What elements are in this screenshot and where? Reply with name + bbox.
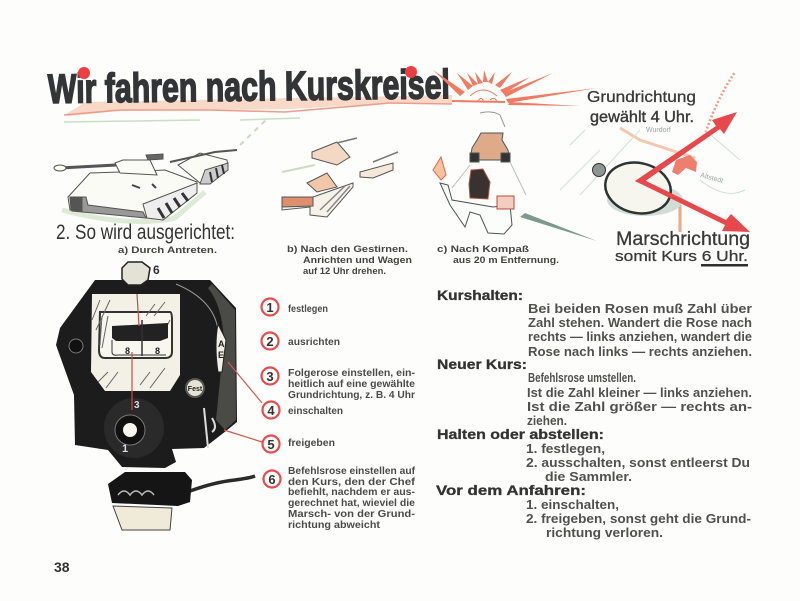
text block: Vor dem Anfahren: 1. einschalten, xyxy=(526,498,619,512)
text block: Vor dem Anfahren: 2. freigeben, sonst geht die Grund- xyxy=(526,512,751,526)
text block: Neuer Kurs: Neuer Kurs: xyxy=(437,357,527,372)
red legend leader lines xyxy=(224,362,262,442)
text block: Vor dem Anfahren: richtung verloren. xyxy=(546,526,663,540)
label: Grundrichtung: Grundrichtung xyxy=(587,89,696,106)
step 1: festlegen xyxy=(288,304,328,315)
scale digit right: 8 xyxy=(155,346,160,356)
text block: Vor dem Anfahren: Vor dem Anfahren: xyxy=(436,483,586,498)
caption c: c) Nach Kompaß xyxy=(437,244,529,255)
title: Wir fahren nach Kurskreisel xyxy=(48,61,450,112)
text block: Kurshalten: Rose nach links — rechts anziehen. xyxy=(528,345,752,359)
text block: Kurshalten: Kurshalten: xyxy=(437,288,523,303)
text block: Vor dem Anfahren xyxy=(436,483,751,540)
text block: Halten oder abstellen: die Sammler. xyxy=(545,470,632,484)
label: Marschrichtung: Marschrichtung xyxy=(616,229,750,250)
caption b: b) Nach den Gestirnen. xyxy=(287,244,408,255)
label: Marschrichtung: somit Kurs 6 Uhr. xyxy=(615,248,748,265)
caption b xyxy=(287,244,412,277)
step 2: ausrichten xyxy=(288,337,340,348)
number 3: 3 xyxy=(134,400,140,411)
heading: So wird ausgerichtet: 2. So wird ausgerichtet: xyxy=(56,221,235,244)
red pointer lines xyxy=(132,294,139,410)
page number: 38 xyxy=(54,559,70,575)
dial knob xyxy=(104,398,164,458)
step 4: einschalten xyxy=(288,406,343,417)
caption b: auf 12 Uhr drehen. xyxy=(303,266,386,277)
step 2: 2 xyxy=(266,334,274,349)
label: Marschrichtung xyxy=(615,229,750,266)
legend: numbered steps xyxy=(262,298,416,531)
knob top xyxy=(122,262,150,285)
housing xyxy=(56,280,237,468)
caption b: Anrichten und Wagen xyxy=(303,255,412,266)
step 3: heitlich auf eine gewählte xyxy=(288,379,415,390)
caption c xyxy=(437,244,559,266)
scale digit left: 8 xyxy=(125,346,130,356)
letter E: E xyxy=(218,350,224,360)
step 1: 1 xyxy=(266,300,274,315)
illustration: tanks by stars xyxy=(282,138,398,217)
step 6: richtung abweicht xyxy=(288,520,381,531)
Fest button: Fest xyxy=(188,386,203,393)
step 3 xyxy=(262,368,415,401)
caption c: aus 20 m Entfernung. xyxy=(453,255,559,266)
text: map place name Wurdorf: Wurdorf xyxy=(646,127,671,134)
lever xyxy=(204,408,215,448)
AE switch xyxy=(216,324,226,372)
illustration: commander with compass and tank xyxy=(433,112,597,241)
text block: Halten oder abstellen: Halten oder abstellen: xyxy=(437,427,604,442)
title banner with brush stroke xyxy=(48,61,452,122)
step 6: den Kurs, den der Chef xyxy=(288,477,416,488)
Fest button xyxy=(186,379,204,397)
text block: Neuer Kurs xyxy=(437,357,752,428)
text block: Neuer Kurs: ziehen. xyxy=(527,414,567,428)
window plate xyxy=(91,294,180,391)
red direction arrows xyxy=(635,112,750,232)
text block: Kurshalten: Bei beiden Rosen muß Zahl über xyxy=(528,302,752,316)
step 6: gerechnet hat, wieviel die xyxy=(288,498,415,509)
step 6: 6 xyxy=(268,472,276,487)
text block: Neuer Kurs: Ist die Zahl kleiner — links anziehen. xyxy=(527,386,752,400)
step 6: befiehlt, nachdem er aus- xyxy=(288,487,415,498)
step 1 xyxy=(262,298,328,316)
cable xyxy=(190,476,255,491)
step 4: 4 xyxy=(267,403,275,418)
illustration: map with pocket watch xyxy=(560,72,745,232)
step 5: 5 xyxy=(267,437,275,452)
step 6: Befehlsrose einstellen auf xyxy=(288,466,416,477)
text block: Halten oder abstellen: 1. festlegen, xyxy=(526,442,605,456)
base mount xyxy=(108,472,192,506)
text: map place name Altstedt: Altstedt xyxy=(699,172,724,185)
device: Kurskreisel instrument xyxy=(56,262,255,530)
text block: Kurshalten xyxy=(437,288,752,359)
text block: Halten oder abstellen: 2. ausschalten, sonst entleerst Du xyxy=(526,456,750,470)
illustration: tanks in line xyxy=(54,118,268,222)
step 3: 3 xyxy=(266,369,274,384)
step 5: freigeben xyxy=(288,438,335,449)
step 4 xyxy=(262,402,343,418)
step 3: Folgerose einstellen, ein- xyxy=(288,368,415,379)
step 2 xyxy=(262,332,340,350)
text block: Kurshalten: Zahl stehen. Wandert die Rose nach xyxy=(528,316,752,330)
illustration: sun with rays xyxy=(433,70,597,106)
step 3: Grundrichtung, z. B. 4 Uhr xyxy=(288,390,415,401)
letter A: A xyxy=(218,339,225,349)
number 1: 1 xyxy=(122,443,128,455)
caption a: a) Durch Antreten. xyxy=(118,245,217,256)
compass scale xyxy=(112,323,168,341)
step 6 xyxy=(264,466,416,531)
step 6: Marsch- von der Grund- xyxy=(288,509,415,520)
left screw xyxy=(69,339,83,353)
text block: Neuer Kurs: Befehlsrose umstellen. xyxy=(528,371,636,385)
text block: Neuer Kurs: Ist die Zahl größer — rechts an- xyxy=(527,400,752,414)
label: Grundrichtung xyxy=(587,89,696,126)
label: Grundrichtung: gewählt 4 Uhr. xyxy=(590,109,694,126)
step 5 xyxy=(262,436,335,452)
text block: Kurshalten: rechts — links anziehen, wandert die xyxy=(528,330,752,344)
number 6 on knob: 6 xyxy=(153,263,160,277)
text block: Halten oder abstellen xyxy=(437,427,750,484)
